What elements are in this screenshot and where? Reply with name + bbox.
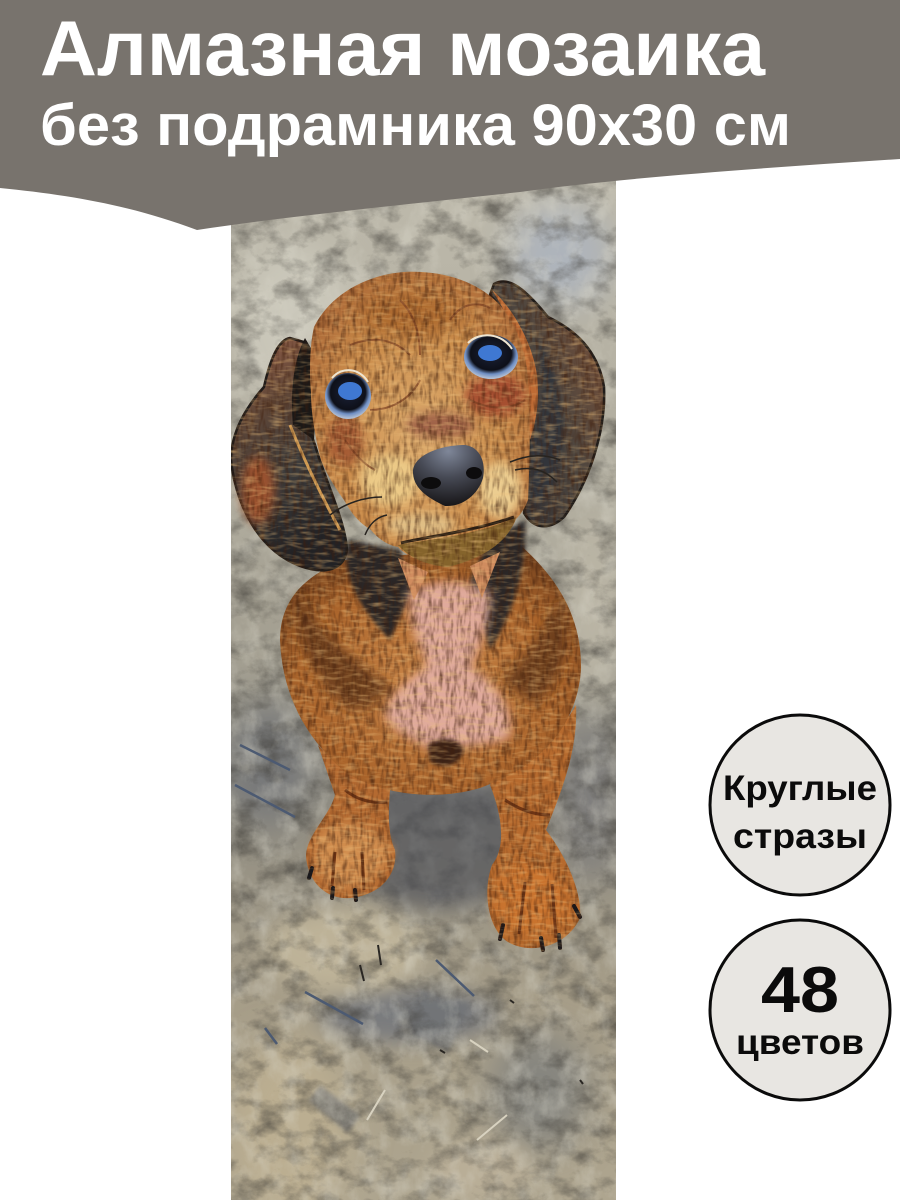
left ear — [231, 338, 347, 570]
badge: round rhinestones — [710, 715, 890, 895]
nose — [413, 445, 484, 506]
badge: 48 colours: 48 — [761, 953, 839, 1026]
concrete background — [226, 180, 624, 1200]
title: Алмазная мозаика — [40, 4, 766, 92]
chin — [398, 517, 516, 567]
whiskers — [330, 456, 560, 535]
badge: round rhinestones: стразы — [733, 817, 867, 856]
forehead shading — [360, 293, 460, 337]
mouth — [401, 517, 514, 543]
badge: 48 colours — [710, 920, 890, 1100]
body — [280, 520, 581, 795]
head — [310, 272, 530, 567]
subtitle: без подрамника 90х30 см — [40, 93, 791, 158]
badge: 48 colours: цветов — [736, 1023, 864, 1062]
right eye — [464, 335, 518, 379]
left eye — [325, 370, 371, 419]
left front leg — [306, 745, 395, 900]
photo: dachshund puppy artwork — [226, 180, 624, 1200]
header banner — [0, 0, 900, 230]
right ear — [490, 281, 604, 526]
neck dark markings — [346, 520, 525, 650]
badge: round rhinestones: Круглые — [723, 769, 877, 808]
collar flaps — [398, 552, 500, 600]
right front leg — [487, 705, 580, 950]
ground shadow — [368, 784, 501, 920]
pink chest — [385, 582, 510, 755]
